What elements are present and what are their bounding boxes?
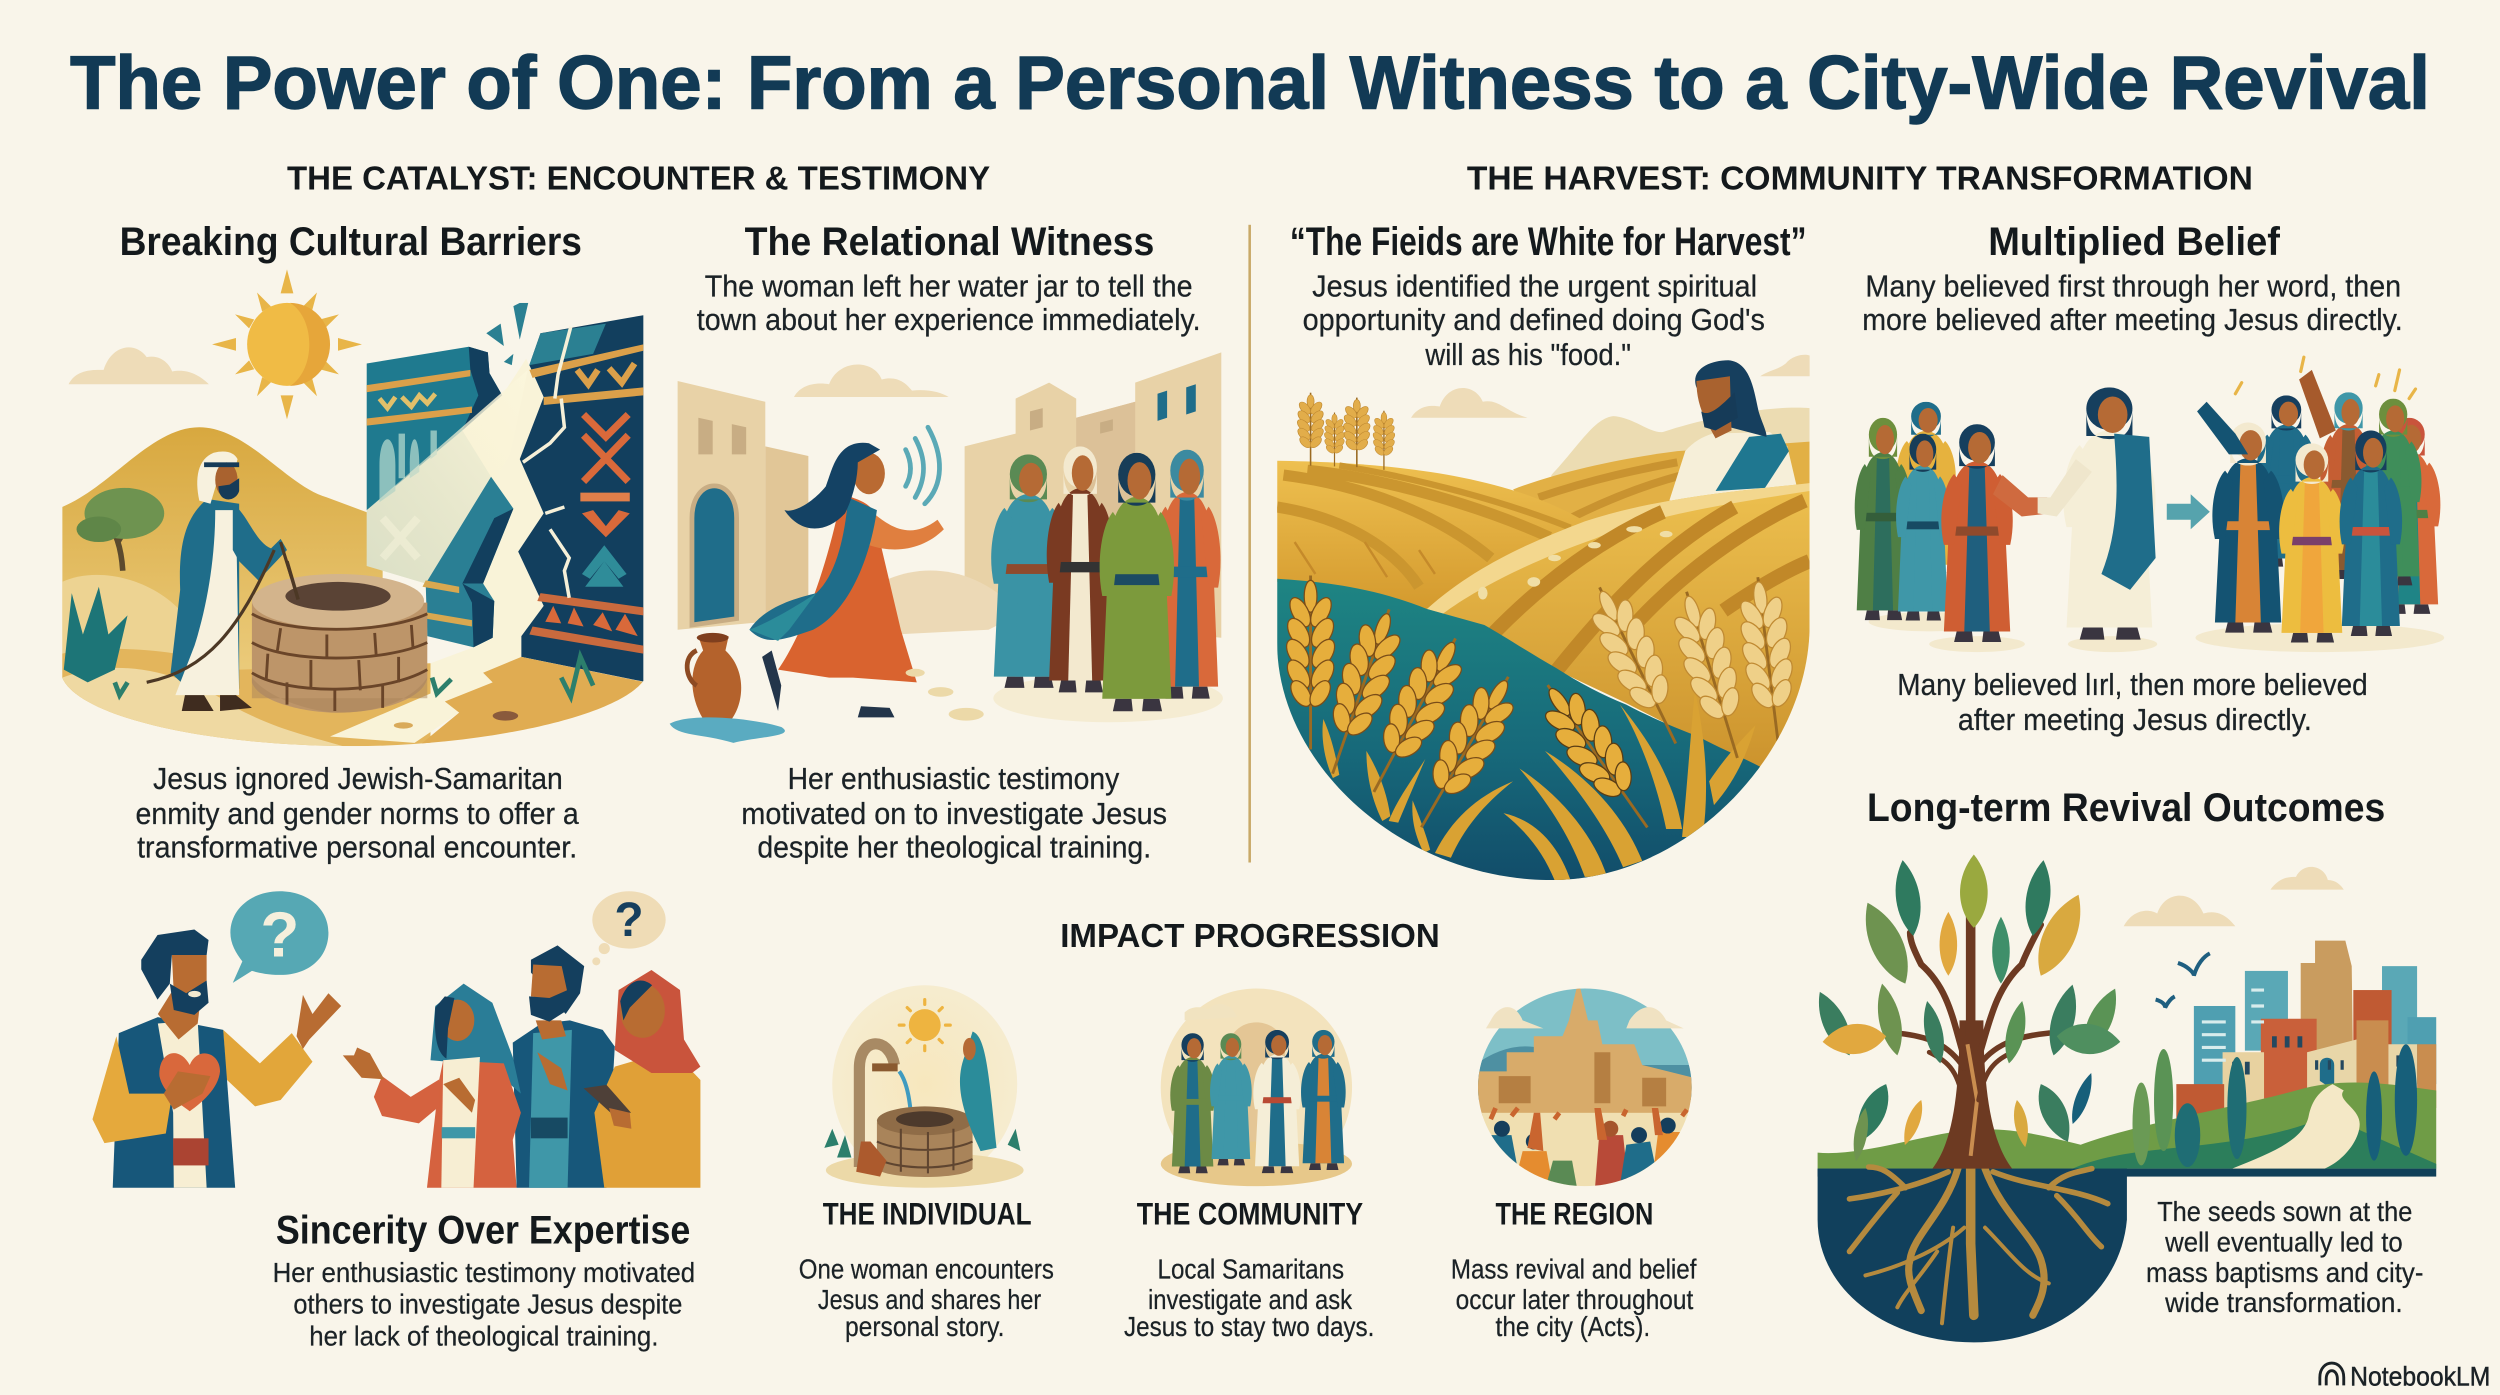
text: revival outcome bbox=[2146, 1196, 2423, 1318]
text: region description: Mass revival and belief bbox=[1451, 1254, 1697, 1285]
text: sincerity body bbox=[273, 1257, 695, 1352]
person: jesus bbox=[2063, 387, 2156, 640]
sand ground right bbox=[422, 656, 643, 744]
title: The Power of One: From a Personal Witness to a City-Wide Revival bbox=[70, 40, 2430, 124]
label: the community: THE COMMUNITY bbox=[1137, 1196, 1363, 1231]
text: community description: investigate and ask bbox=[1148, 1284, 1352, 1315]
city skyline bbox=[2176, 941, 2436, 1129]
person: speaker with heart bbox=[92, 929, 341, 1188]
panel: multiplied belief bbox=[1855, 220, 2444, 737]
left field hill bbox=[1277, 461, 1602, 609]
caption: relational witness bbox=[741, 763, 1167, 865]
cloud bbox=[69, 347, 209, 384]
text: region description bbox=[1451, 1254, 1697, 1342]
icon: thought bubble question: ? bbox=[614, 894, 644, 947]
text: revival outcome: mass baptisms and city- bbox=[2146, 1257, 2423, 1288]
caption: multiplied belief bbox=[1897, 669, 2368, 737]
step: the region bbox=[1451, 980, 1698, 1342]
navy ground strip bbox=[1818, 1169, 2436, 1177]
text: individual description: One woman encounters bbox=[799, 1254, 1054, 1285]
cloud bbox=[794, 364, 949, 397]
badge: notebooklm: NotebookLM bbox=[2350, 1360, 2490, 1391]
left group of believers bbox=[1855, 387, 2157, 652]
panel: breaking cultural barriers bbox=[62, 220, 646, 865]
icon: sun bbox=[212, 269, 362, 419]
heading: multiplied belief: Multiplied Belief bbox=[1988, 220, 2281, 264]
text: sincerity body: her lack of theological training. bbox=[309, 1321, 658, 1352]
text: relational witness intro: The woman left her water jar to tell the bbox=[705, 271, 1193, 304]
text: community description: Jesus to stay two days. bbox=[1124, 1311, 1374, 1342]
label: the region: THE REGION bbox=[1496, 1196, 1653, 1231]
distant wheat stalks bbox=[1295, 393, 1397, 470]
text: region description: occur later throughout bbox=[1456, 1284, 1693, 1315]
icon: city crowd bbox=[1478, 988, 1692, 1186]
stone well bbox=[252, 561, 427, 713]
crack and beam of light bbox=[330, 359, 544, 743]
water jar bbox=[670, 633, 785, 743]
arrow: progression bbox=[2167, 494, 2210, 529]
text: sincerity body: Her enthusiastic testimony motivated bbox=[273, 1257, 695, 1288]
heading: the harvest: THE HARVEST: COMMUNITY TRANSFORMATION bbox=[1467, 161, 2253, 198]
icon: speech bubble question bbox=[230, 891, 328, 983]
panel divider bbox=[1248, 225, 1251, 863]
icon: voice waves bbox=[906, 427, 940, 504]
cypress trees bbox=[2132, 1044, 2417, 1167]
person: woman running bbox=[749, 443, 944, 717]
root bowl bbox=[1818, 1169, 2127, 1342]
panel: the relational witness bbox=[670, 220, 1223, 865]
faded lit wall bbox=[366, 431, 491, 583]
person: jesus at well bbox=[147, 452, 303, 711]
tree leaves bbox=[1810, 855, 2125, 1163]
person: jesus overlooking field bbox=[1669, 360, 1800, 501]
step: the individual bbox=[799, 985, 1054, 1342]
caption: multiplied belief: after meeting Jesus directly. bbox=[1958, 704, 2312, 737]
text: fields intro: opportunity and defined doing God's bbox=[1303, 304, 1765, 337]
heading: fields are white: “The Fieids are White for Harvest” bbox=[1290, 220, 1806, 264]
label: the individual: THE INDIVIDUAL bbox=[823, 1196, 1032, 1231]
text: multiplied intro: more believed after meeting Jesus directly. bbox=[1862, 304, 2403, 337]
clouds over city bbox=[1486, 1007, 1684, 1028]
text: individual description bbox=[799, 1254, 1054, 1342]
back hill bbox=[1513, 442, 1810, 522]
small cloud bbox=[1760, 355, 1810, 376]
caption: breaking cultural barriers bbox=[136, 763, 579, 865]
heading: the catalyst: THE CATALYST: ENCOUNTER & TESTIMONY bbox=[287, 161, 990, 198]
cloud bbox=[1411, 388, 1527, 418]
caption: multiplied belief: Many believed lırl, then more believed bbox=[1897, 669, 2368, 702]
caption: breaking cultural barriers: enmity and gender norms to offer a bbox=[136, 798, 579, 831]
heading: impact progression: IMPACT PROGRESSION bbox=[1060, 918, 1440, 955]
caption: breaking cultural barriers: Jesus ignored Jewish-Samaritan bbox=[153, 763, 563, 796]
wheat blades bbox=[1322, 690, 1755, 880]
illustration: wheat field bbox=[1277, 360, 1810, 893]
ground footprints bbox=[906, 669, 984, 721]
text: multiplied intro: Many believed first through her word, then bbox=[1865, 271, 2401, 304]
right wall section bbox=[518, 315, 643, 682]
text: individual description: personal story. bbox=[845, 1311, 1004, 1342]
text: region description: the city (Acts). bbox=[1496, 1311, 1650, 1342]
heading: long-term revival outcomes: Long-term Revival Outcomes bbox=[1867, 786, 2385, 830]
roots bbox=[1849, 1167, 2108, 1323]
text: community description: Local Samaritans bbox=[1158, 1254, 1344, 1285]
panel: long-term revival outcomes bbox=[1810, 786, 2436, 1342]
wall pattern bbox=[584, 415, 628, 481]
person: woman in teal veil bbox=[343, 984, 521, 1188]
text: fields intro: Jesus identified the urgent spiritual bbox=[1312, 271, 1757, 304]
heading: sincerity over expertise: Sincerity Over Expertise bbox=[276, 1209, 690, 1253]
panel: sincerity over expertise bbox=[92, 891, 700, 1352]
illustration: well and broken wall bbox=[62, 298, 646, 749]
agave plant bbox=[64, 587, 128, 682]
heading: breaking cultural barriers: Breaking Cultural Barriers bbox=[120, 220, 582, 264]
text: multiplied intro bbox=[1862, 271, 2403, 337]
ground plants bbox=[115, 657, 593, 697]
text: revival outcome: wide transformation. bbox=[2164, 1287, 2403, 1318]
text: individual description: Jesus and shares her bbox=[818, 1284, 1041, 1315]
text: fields intro: will as his "food." bbox=[1424, 339, 1631, 372]
heading: the relational witness: The Relational Witness bbox=[745, 220, 1154, 264]
clouds bbox=[2124, 867, 2344, 926]
icon: thought bubble question bbox=[592, 891, 666, 965]
icon: group with jesus bbox=[1161, 988, 1352, 1186]
text: revival outcome: The seeds sown at the bbox=[2157, 1196, 2412, 1227]
foreground teal hill bbox=[1277, 578, 1760, 880]
large wheat ears bbox=[1282, 574, 1807, 844]
birds bbox=[2156, 953, 2210, 1008]
right field hill bbox=[1427, 483, 1810, 797]
text: fields intro bbox=[1303, 271, 1765, 372]
person: man bbox=[513, 945, 615, 1188]
town buildings bbox=[678, 352, 1221, 638]
clasped hands bbox=[1993, 475, 2050, 517]
icon: well and woman bbox=[824, 985, 1024, 1188]
text: relational witness intro: town about her experience immediately. bbox=[697, 304, 1201, 337]
step: the community bbox=[1124, 988, 1374, 1342]
left wall section bbox=[367, 347, 502, 510]
text: revival outcome: well eventually led to bbox=[2164, 1227, 2403, 1258]
text: sincerity body: others to investigate Jesus despite bbox=[293, 1289, 682, 1320]
tree trunk and branches bbox=[1897, 893, 2049, 1169]
panel: impact progression bbox=[799, 918, 1698, 1342]
text: community description bbox=[1124, 1254, 1374, 1342]
group of four townspeople bbox=[991, 446, 1223, 722]
text: relational witness intro bbox=[697, 271, 1201, 337]
caption: relational witness: motivated on to investigate Jesus bbox=[741, 798, 1167, 831]
green hills and path bbox=[1818, 1082, 2436, 1169]
person: woman in red scarf bbox=[584, 970, 700, 1188]
caption: breaking cultural barriers: transformative personal encounter. bbox=[137, 832, 577, 865]
caption: relational witness: despite her theological training. bbox=[757, 832, 1151, 865]
tree in landscape bbox=[77, 488, 164, 571]
icon: speech bubble question: ? bbox=[260, 899, 299, 971]
right crowd of believers bbox=[2195, 357, 2444, 652]
caption: relational witness: Her enthusiastic testimony bbox=[788, 763, 1120, 796]
panel: the fields are white for harvest bbox=[1277, 220, 1810, 893]
lower left wall block bbox=[426, 477, 513, 647]
